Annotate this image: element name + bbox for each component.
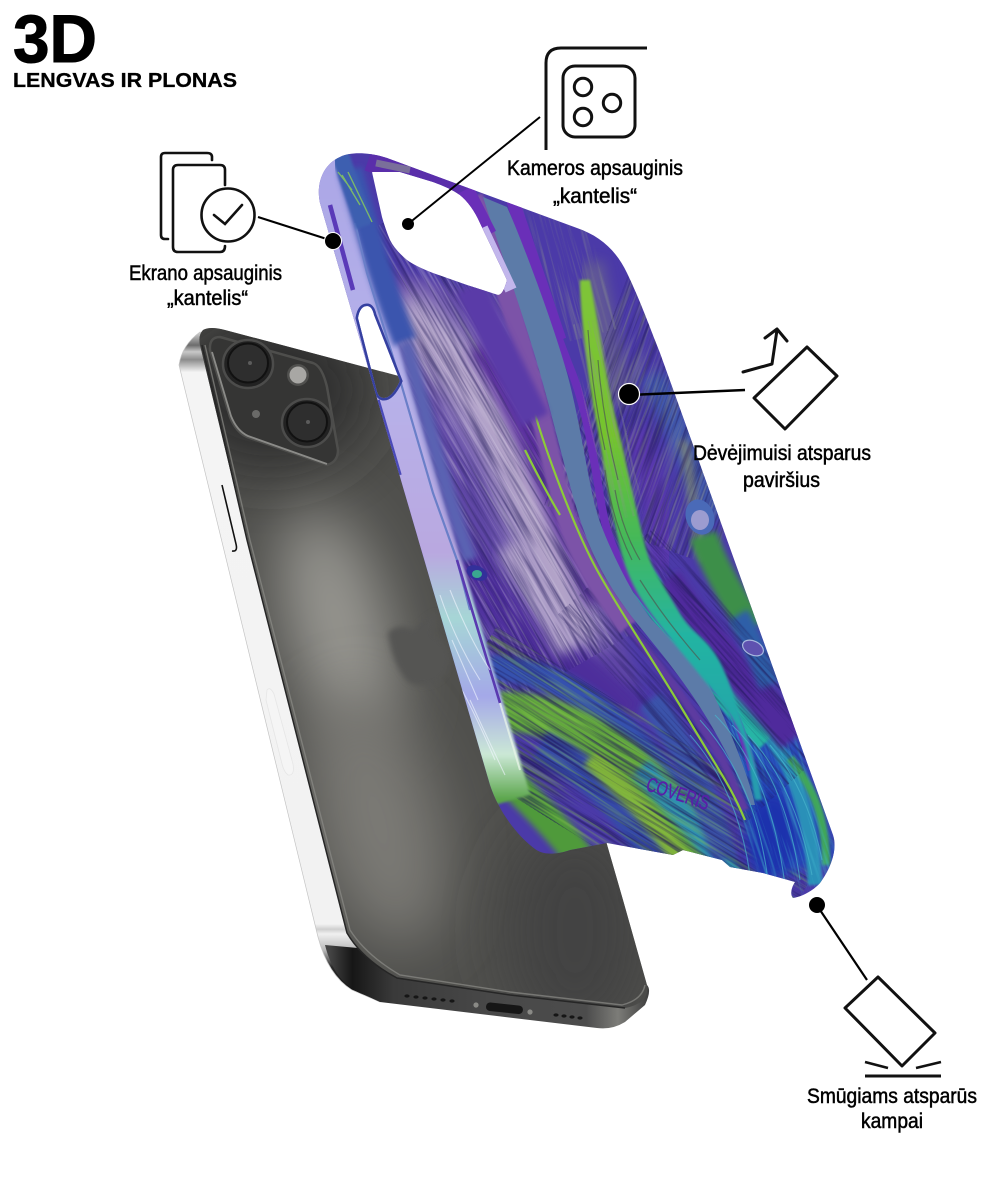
marker dot (324, 232, 342, 250)
upper right field (592, 262, 624, 405)
subheading: LENGVAS IR PLONAS (13, 70, 237, 92)
phone: grey iPhone back (170, 310, 660, 1040)
icon: tilted card with arrow (743, 329, 837, 429)
feather strands (440, 590, 822, 885)
label line 2: kampai (861, 1110, 923, 1133)
phone case with marbled pattern (318, 153, 835, 898)
case brand mark: COVERIS (643, 774, 712, 815)
marker dot (618, 384, 640, 404)
volume switch (222, 485, 236, 551)
apple logo (386, 626, 420, 684)
lavender feather (395, 310, 578, 650)
icon: impact on corner (845, 977, 941, 1076)
microphone (252, 410, 260, 418)
phone side frame (179, 332, 420, 1002)
camera plate (210, 337, 338, 465)
blue fan lower right (720, 707, 834, 880)
callout: shock resistant corners (807, 897, 977, 1133)
label line 2: paviršius (743, 469, 820, 492)
phone edge highlight (202, 345, 625, 1008)
droplets (686, 500, 714, 535)
teal feather and purple swath (635, 572, 770, 738)
flash (287, 364, 309, 386)
icon: screen protection (161, 153, 254, 252)
icon: camera protection (546, 48, 647, 150)
label: Dėvėjimuisi atsparus (693, 442, 871, 465)
phone bottom edge band (325, 945, 649, 1028)
lower band streaks (486, 626, 834, 898)
lower colour bands (490, 668, 680, 800)
callout: camera lip (402, 48, 683, 230)
left rim (322, 150, 512, 800)
marker dot (809, 897, 825, 913)
callout: wear resistant surface (618, 329, 871, 492)
green stripe streaks (573, 320, 640, 520)
heading: 3D: 3D (13, 1, 97, 77)
feather streaks on teal (558, 529, 808, 823)
leader line (408, 117, 540, 224)
label: Smūgiams atsparūs (807, 1085, 977, 1108)
label line 2: „kantelis“ (167, 287, 248, 310)
phone back surface (199, 328, 647, 1008)
centre feather streaks (334, 222, 670, 696)
label: Ekrano apsauginis (129, 262, 282, 285)
leader line (820, 910, 867, 980)
speaker holes and port (404, 994, 583, 1020)
label line 2: „kantelis“ (553, 185, 637, 208)
lens 2 (282, 399, 332, 447)
leader line (258, 217, 333, 241)
side button outline (266, 689, 293, 775)
leader line (629, 390, 745, 395)
marker dot (402, 218, 414, 230)
label: Kameros apsauginis (507, 157, 683, 180)
lens 1 (223, 340, 273, 388)
blue-grey ribbon (483, 197, 755, 805)
callout: screen lip (129, 153, 342, 310)
side button hole rim (358, 306, 400, 398)
top rim and camera surround (368, 161, 465, 196)
ribbon edges (473, 197, 628, 627)
blue fan streaks (725, 686, 834, 896)
top field streaks (522, 208, 616, 342)
dark strands over green stripe (588, 330, 700, 660)
lime thread (525, 407, 745, 820)
right field streaks (547, 278, 724, 560)
green stripe (580, 280, 762, 800)
